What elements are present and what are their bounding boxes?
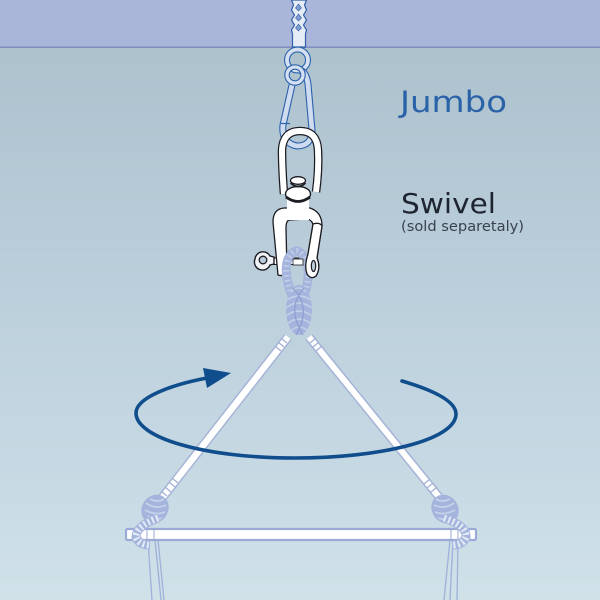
label: sold separately note: (sold separetaly) xyxy=(401,219,524,235)
rotation arrow xyxy=(136,368,456,458)
shackle eye xyxy=(311,260,316,272)
left rope xyxy=(161,337,288,498)
left knot xyxy=(136,489,174,545)
shackle xyxy=(254,208,322,278)
rope loop and knot xyxy=(286,251,312,335)
wooden bar xyxy=(126,529,476,540)
swivel barrel xyxy=(286,177,310,220)
label: Jumbo: Jumbo xyxy=(398,85,507,119)
right rope xyxy=(309,337,439,497)
shackle body xyxy=(273,208,322,278)
right knot xyxy=(426,489,466,545)
label: Swivel: Swivel xyxy=(401,187,496,220)
ceiling band xyxy=(0,0,600,48)
knot xyxy=(286,285,312,335)
hanging rope xyxy=(292,0,306,47)
carabiner links xyxy=(281,50,312,146)
pin eye xyxy=(254,252,274,270)
shackle pin xyxy=(268,258,312,264)
pin seen through loop xyxy=(293,259,303,265)
hanging lines below bar xyxy=(148,540,458,600)
carabiner xyxy=(281,70,312,146)
swivel upper D-ring highlight xyxy=(282,131,318,194)
shackle right leg in front of rope xyxy=(306,223,322,278)
small ring xyxy=(287,67,303,83)
top ring xyxy=(287,50,308,70)
arrowhead xyxy=(203,368,231,388)
swivel upper D-ring xyxy=(282,131,318,194)
